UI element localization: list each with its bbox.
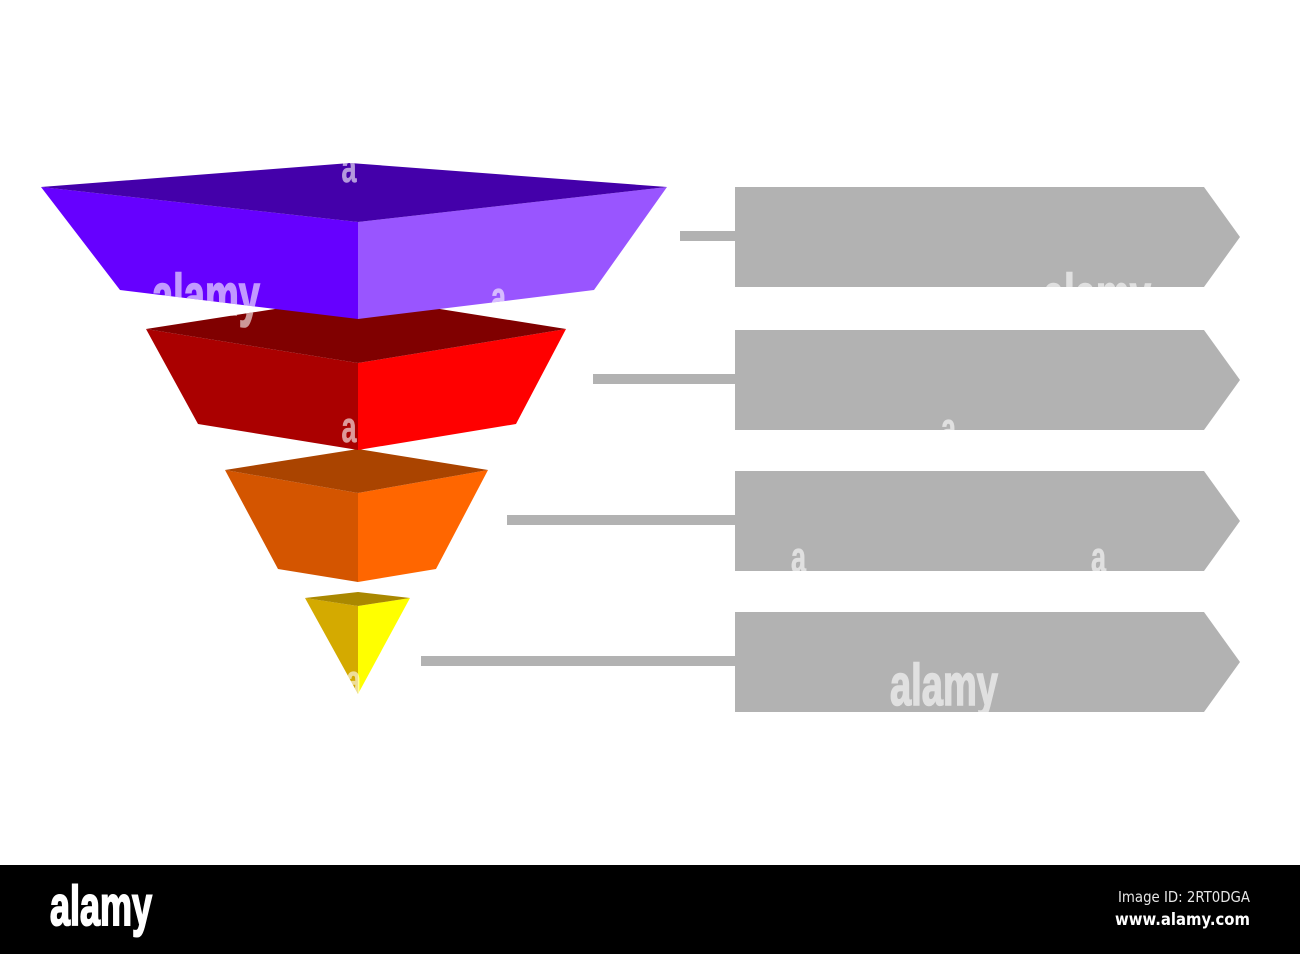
funnel tier 4: yellow [305,592,410,694]
funnel [41,163,667,694]
watermarks: a [346,656,361,705]
watermarks: a [342,143,357,192]
watermarks: a [342,403,357,452]
connector line 3 [507,515,736,525]
connector line 1 [680,231,736,241]
image id: Image ID: 2RT0DGA [1118,888,1251,906]
connector line 2 [593,374,736,384]
funnel tier 2: red [146,296,566,450]
website url: www.alamy.com [1115,910,1250,930]
funnel tier 3: orange [225,449,488,582]
label arrow box 4 [735,612,1240,712]
watermarks: alamy [890,653,998,718]
watermarks [152,143,1151,718]
connector line 4 [421,656,736,666]
watermarks: alamy [1043,263,1151,328]
watermarks: a [941,404,956,453]
watermarks: a [1091,533,1106,582]
footer logo: alamy [50,874,152,937]
label arrow box 3 [735,471,1240,571]
label arrow box 2 [735,330,1240,430]
footer bar [0,865,1300,954]
watermarks: a [791,533,806,582]
watermarks: a [491,273,506,322]
label arrow box 1 [735,187,1240,287]
funnel tier 1: blue [41,163,667,319]
watermarks: alamy [152,263,260,328]
